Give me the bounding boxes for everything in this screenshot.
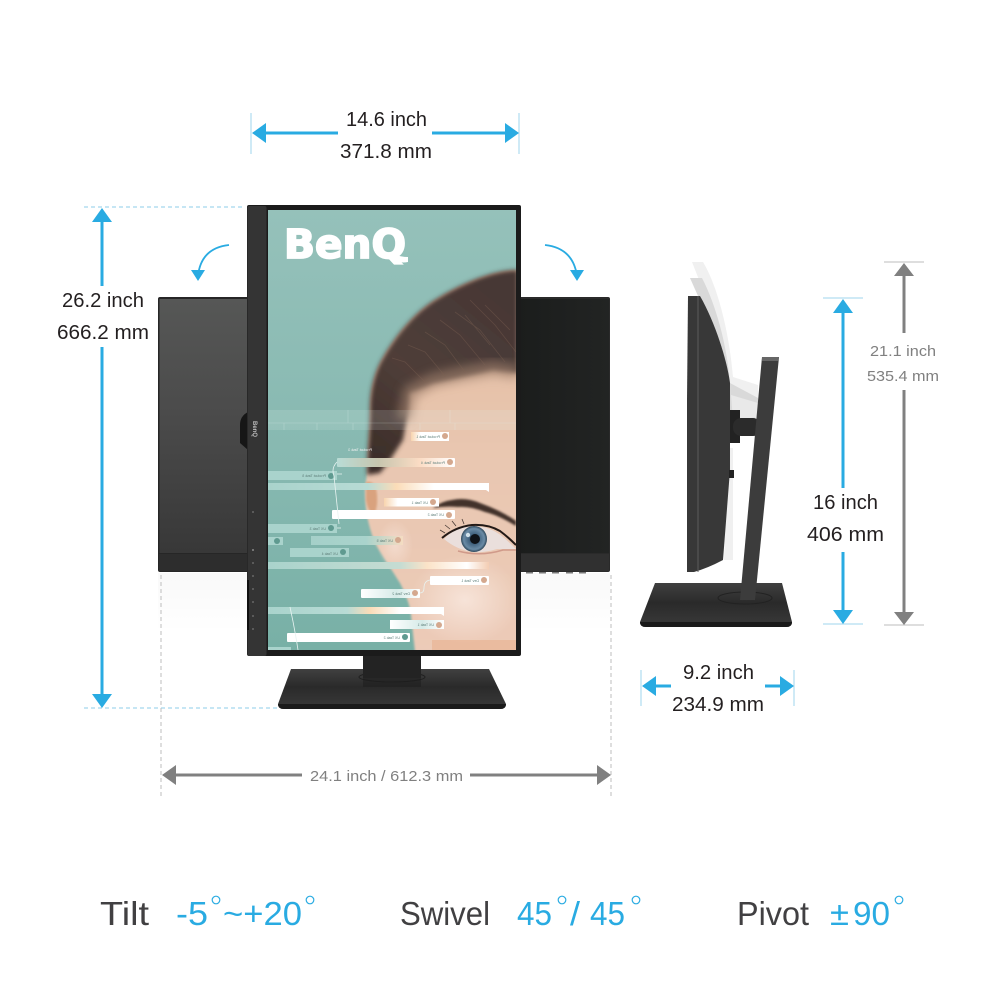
spec: swivel: / <box>570 895 581 932</box>
task labels <box>302 435 479 640</box>
side hinge <box>729 410 761 478</box>
spec: pivot: ± <box>830 895 849 932</box>
spec: swivel: Swivel <box>400 895 490 932</box>
height dimension 21.1 inch: 535.4 mm <box>867 368 939 385</box>
task labels: Product Task 1 <box>416 435 440 439</box>
left landscape rear panel <box>158 297 250 572</box>
tilt arrow left <box>191 245 229 281</box>
task labels: UX Task 1 <box>412 501 428 505</box>
spec: pivot: Pivot <box>737 895 809 932</box>
spec: tilt: Tilt <box>100 895 149 932</box>
task labels: Dev Task 1 <box>461 579 479 583</box>
width dimension 24.1 inch: 24.1 inch / 612.3 mm <box>310 768 463 785</box>
depth dimension 9.2 inch: 9.2 inch <box>683 662 754 684</box>
height dimension 16 inch: 16 inch <box>813 492 878 514</box>
spec: swivel <box>400 895 640 932</box>
side screen panel <box>687 296 730 572</box>
spec: tilt <box>100 895 314 932</box>
task labels: UX Task 4 <box>322 552 338 556</box>
depth dimension 9.2 inch: 234.9 mm <box>672 694 764 716</box>
task labels: UX Task 2 <box>428 513 444 517</box>
ear <box>366 482 377 515</box>
spec: pivot <box>737 895 903 932</box>
task labels: Product Task 3 <box>348 448 372 452</box>
hairline fade <box>404 368 518 420</box>
height dimension 21.1 inch <box>867 262 939 625</box>
ghost tilt positions <box>690 262 758 560</box>
hair strands <box>392 300 516 382</box>
width dimension 14.6 inch: 14.6 inch <box>346 109 427 131</box>
task labels: Product Task 4 <box>421 461 445 465</box>
task labels: UX Task 3 <box>310 527 326 531</box>
height dimension 26.2 inch: 26.2 inch <box>62 290 144 312</box>
BenQ logo on screen: BenQ <box>284 222 406 268</box>
connector lines <box>290 462 430 650</box>
lower eyelid tint <box>458 550 516 554</box>
tilt arrow right <box>545 245 584 281</box>
timeline header <box>268 410 516 430</box>
task labels: UX Task 2 <box>384 636 400 640</box>
eye <box>440 519 516 554</box>
width dimension 14.6 inch <box>251 109 519 163</box>
portrait face <box>365 270 520 652</box>
task icons <box>274 433 487 640</box>
height dimension 26.2 inch <box>57 207 280 708</box>
main monitor stand base <box>278 655 506 709</box>
side view monitor <box>640 262 792 627</box>
task bars <box>411 432 449 441</box>
side stand arm <box>740 357 779 600</box>
side base <box>640 583 792 627</box>
spec: tilt: ~+20 <box>223 895 302 932</box>
depth dimension 9.2 inch <box>641 662 794 716</box>
width dimension 14.6 inch: 371.8 mm <box>340 141 432 163</box>
spec: tilt: -5 <box>176 895 208 932</box>
width dimension 24.1 inch <box>161 575 611 796</box>
height dimension 16 inch <box>807 298 884 624</box>
upper eyelid lash line <box>442 525 516 545</box>
left bezel <box>247 206 266 656</box>
task labels: Dev Task 2 <box>392 592 410 596</box>
eyebrow <box>433 499 516 526</box>
height dimension 21.1 inch: 21.1 inch <box>870 343 936 360</box>
right landscape rear panel <box>519 297 610 574</box>
spec: pivot: 90 <box>853 895 890 932</box>
hinge <box>240 412 248 450</box>
left bezel: BenQ <box>251 421 257 437</box>
task labels: UX Task 5 <box>377 539 393 543</box>
screen <box>268 210 520 652</box>
height dimension 26.2 inch: 666.2 mm <box>57 322 149 344</box>
infographic canvas <box>58 111 938 926</box>
floor shadow under rear panels <box>158 573 610 633</box>
task labels: Product Task 5 <box>302 474 326 478</box>
task labels: UX Task 1 <box>418 623 434 627</box>
main monitor in portrait <box>247 205 521 656</box>
hair <box>367 270 518 475</box>
height dimension 16 inch: 406 mm <box>807 524 884 546</box>
spec: swivel: 45 <box>590 895 625 932</box>
stand neck <box>363 655 421 678</box>
mirrored Gantt overlay <box>268 410 516 650</box>
spec: swivel: 45 <box>517 895 552 932</box>
